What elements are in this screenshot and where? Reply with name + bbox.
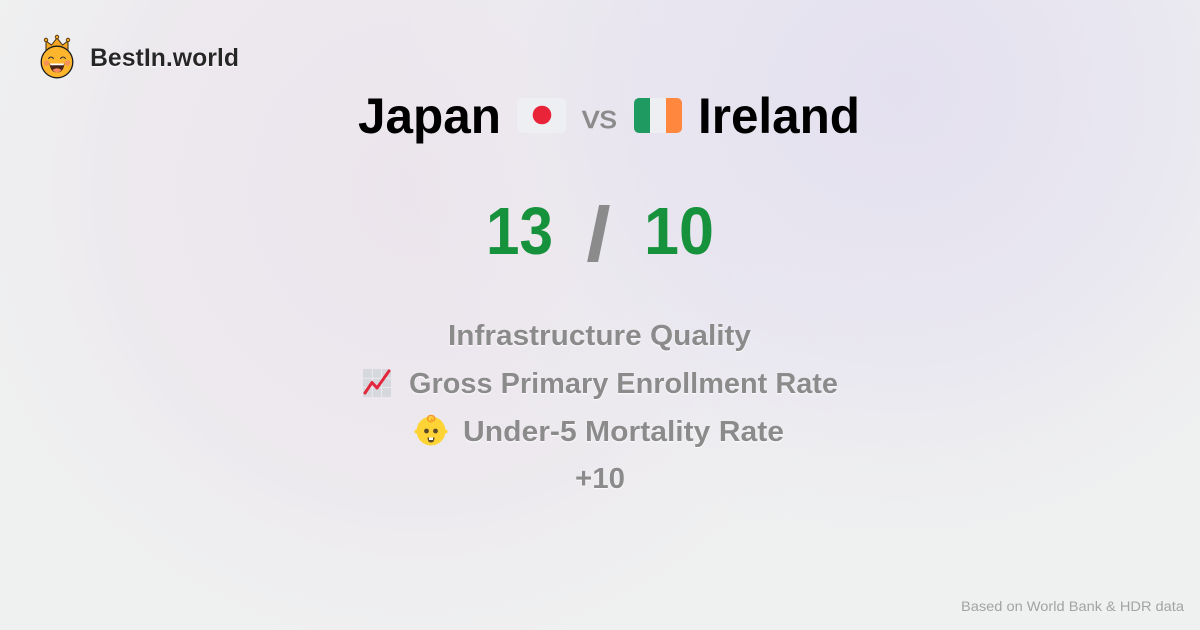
- list of metrics: [363, 320, 838, 495]
- score: Japan: 13: [486, 194, 553, 269]
- metric: Infrastructure Quality: Infrastructure Quality: [448, 320, 751, 352]
- score: Ireland: 10: [644, 194, 714, 269]
- metric: more count: +10: [575, 463, 625, 495]
- brand name: BestIn.world: [90, 44, 239, 72]
- flag: Ireland: [634, 98, 682, 133]
- icon: chart increasing: [363, 369, 391, 397]
- country name: Ireland: Ireland: [698, 88, 860, 144]
- data source note: Based on World Bank & HDR data: [961, 598, 1184, 614]
- logo: crowned smiley: [41, 35, 73, 78]
- title: Japan vs Ireland: [358, 96, 857, 144]
- vs label: vs: [582, 99, 617, 135]
- score comparison: [486, 192, 714, 276]
- flag: Japan: [517, 98, 566, 133]
- metric: Gross Primary Enrollment Rate: Gross Primary Enrollment Rate: [409, 368, 838, 400]
- icon: baby face: [414, 416, 448, 446]
- score separator: /: [587, 192, 610, 276]
- metric: Under-5 Mortality Rate: Under-5 Mortality Rate: [463, 416, 784, 448]
- country name: Japan: Japan: [358, 88, 501, 144]
